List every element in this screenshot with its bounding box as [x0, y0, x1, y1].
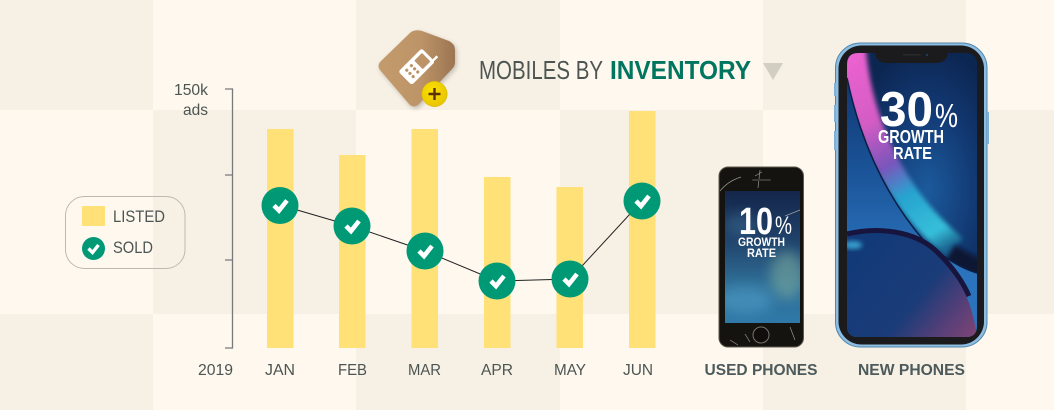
- x axis labels: MAR: [408, 362, 441, 379]
- legend item: sold: SOLD: [113, 238, 153, 257]
- line: sold: [280, 201, 642, 281]
- icon: phone glyph: [398, 44, 439, 85]
- used phones label: USED PHONES: [704, 362, 818, 379]
- new phone growth text: 30: [880, 83, 933, 137]
- used phone growth text: [738, 201, 792, 260]
- bars: listed: [267, 111, 656, 348]
- x axis labels: [198, 362, 653, 379]
- screen: [847, 53, 977, 337]
- x axis labels: FEB: [338, 362, 367, 379]
- new phones label: NEW PHONES: [858, 362, 965, 379]
- new phone growth text: [878, 83, 958, 163]
- used phone: [717, 167, 804, 347]
- x axis labels: JAN: [265, 362, 295, 379]
- new phone growth text: %: [935, 97, 958, 134]
- x axis labels: JUN: [623, 362, 653, 379]
- title: [479, 55, 751, 85]
- chart: listed bars and sold line: [174, 82, 660, 379]
- x axis labels: APR: [481, 362, 513, 379]
- used phone growth text: 10: [739, 201, 773, 243]
- new phone growth text: RATE: [893, 143, 932, 163]
- new phone growth text: GROWTH: [878, 126, 944, 147]
- y axis: [174, 82, 232, 348]
- y axis: 150k: [174, 82, 209, 99]
- wallpaper: upper sweep: [847, 53, 977, 272]
- wallpaper: lower sphere: [847, 231, 977, 337]
- used phone growth text: RATE: [747, 248, 776, 260]
- new phone: [834, 43, 989, 347]
- markers: sold: [262, 182, 660, 300]
- legend: [66, 196, 185, 268]
- legend item: listed: LISTED: [113, 207, 165, 226]
- used phone growth text: %: [775, 212, 792, 240]
- icon: down triangle: [763, 63, 783, 80]
- y axis: ads: [183, 102, 208, 119]
- icon: plus coin: [422, 81, 447, 107]
- icon: phone price tag: [378, 30, 456, 109]
- x axis labels: MAY: [554, 362, 586, 379]
- title: MOBILES BY: [479, 55, 603, 85]
- x axis labels: 2019: [198, 362, 233, 379]
- used phone growth text: GROWTH: [738, 237, 785, 249]
- title: INVENTORY: [610, 55, 751, 85]
